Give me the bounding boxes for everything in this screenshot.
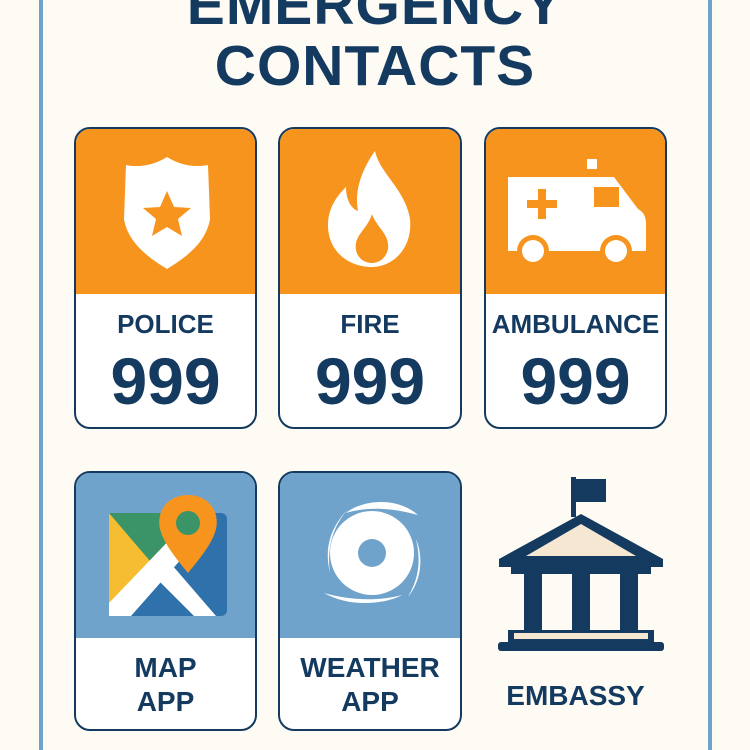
label: embassy: EMBASSY (506, 680, 645, 711)
card: map app: APP (137, 686, 194, 717)
card: fire: FIRE (340, 309, 400, 339)
text: CONTACTS (215, 34, 535, 98)
card: ambulance: AMBULANCE (492, 309, 659, 339)
card: police: POLICE (117, 309, 214, 339)
icon: cyclone (280, 473, 460, 638)
card: weather app: APP (341, 686, 399, 717)
card: weather app: WEATHER (300, 652, 440, 683)
icon: shield (76, 129, 255, 294)
card: map app: MAP (134, 652, 197, 683)
card: fire: 999 (315, 344, 425, 418)
card: police (74, 127, 257, 429)
icon: ambulance (486, 129, 665, 294)
card: fire (278, 127, 462, 429)
card: police: 999 (110, 344, 221, 418)
card: map app (74, 471, 257, 731)
card: ambulance (484, 127, 667, 429)
icon: embassy (498, 477, 664, 651)
icon: flame (280, 129, 460, 294)
title (187, 0, 563, 98)
card: ambulance: 999 (520, 344, 631, 418)
icon: map (76, 473, 255, 638)
card: weather app (278, 471, 462, 731)
